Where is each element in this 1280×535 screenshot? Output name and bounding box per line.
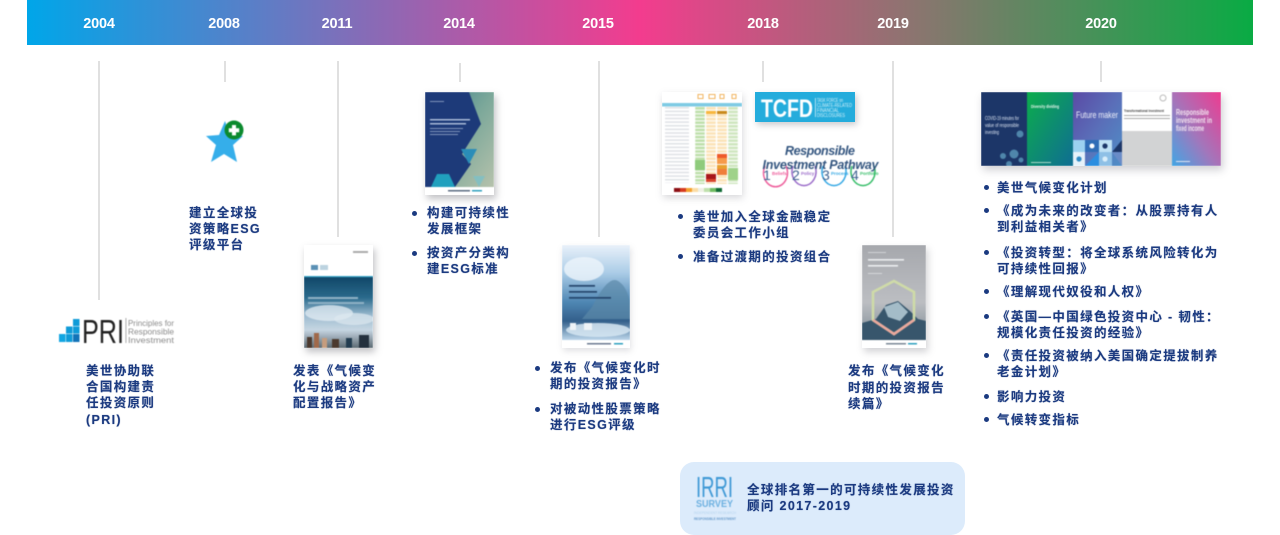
graphic: responsible investment pathway: 4 xyxy=(851,167,859,183)
graphic: responsible investment pathway: 1 xyxy=(763,167,771,183)
cover 1: value of responsible xyxy=(985,123,1019,129)
text: 2008 rating platform: 资策略ESG xyxy=(189,222,261,236)
bullet 6 xyxy=(997,348,1219,379)
bullet: ESG standards: 按资产分类构 xyxy=(427,246,510,260)
bullet: FSB working group: 委员会工作小组 xyxy=(693,226,790,240)
cover 5: Responsible xyxy=(1176,108,1209,117)
logo: PRI: Responsible xyxy=(128,326,174,336)
graphic: responsible investment pathway: Portfolio xyxy=(860,171,879,176)
graphic: responsible investment pathway: 2 xyxy=(792,167,800,183)
cover 4: Transformational Investment xyxy=(1124,108,1164,113)
bullet: ESG standards: 建ESG标准 xyxy=(427,262,499,276)
callout: IRRI survey award xyxy=(680,462,965,535)
text: ranking xyxy=(746,482,955,513)
graphic: responsible investment pathway: 3 xyxy=(822,167,830,183)
text: 2008 rating platform: 评级平台 xyxy=(189,238,244,252)
bullet 2 xyxy=(997,204,1219,234)
logo: IRRI survey: SURVEY xyxy=(696,499,733,510)
cover 3 xyxy=(1073,92,1122,166)
year 2018: 2018 xyxy=(747,16,779,32)
logo: IRRI survey: RESPONSIBLE INVESTMENT xyxy=(694,517,737,521)
text: PRI 2004: (PRI) xyxy=(86,413,122,427)
report cover: 2015 xyxy=(562,245,630,348)
bullet 6: 老金计划》 xyxy=(997,365,1066,379)
report covers: 2020 xyxy=(981,92,1221,166)
text: ranking: 全球排名第一的可持续性发展投资 xyxy=(747,483,955,497)
cover 1: investing xyxy=(985,130,999,136)
report cover: 2011 xyxy=(304,245,373,348)
text: 2019 report sequel: 发布《气候变化 xyxy=(848,364,945,378)
cover 3: Future maker xyxy=(1076,110,1118,121)
cover 2: Diversity dividing xyxy=(1031,104,1059,109)
bullet 6: 《责任投资被纳入美国确定提拔制养 xyxy=(997,349,1219,363)
bullet: climate report: 发布《气候变化时 xyxy=(550,361,661,375)
bullet: passive equity rating xyxy=(550,402,661,432)
bullet: transition portfolio: 准备过渡期的投资组合 xyxy=(693,250,832,264)
graphic: responsible investment pathway: Investment Pathway xyxy=(762,158,880,172)
bullet: climate report xyxy=(550,360,661,391)
text: 2018 bullets xyxy=(693,210,832,264)
text: 2008 rating platform: 建立全球投 xyxy=(189,206,258,220)
year 2019: 2019 xyxy=(877,16,909,32)
text: PRI 2004: 美世协助联 xyxy=(86,364,155,378)
text: 2019 report sequel: 续篇》 xyxy=(848,397,890,411)
text: 2014 bullets xyxy=(426,206,510,276)
bullet 1: 美世气候变化计划 xyxy=(997,181,1108,195)
chart: sector heatmap xyxy=(662,92,742,195)
logo: TCFD xyxy=(755,92,855,122)
graphic: responsible investment pathway: Beliefs xyxy=(772,171,787,176)
bullet: framework: 发展框架 xyxy=(427,222,482,236)
text: PRI 2004 xyxy=(86,364,155,427)
cover 4 xyxy=(1122,92,1172,166)
text: PRI 2004: 任投资原则 xyxy=(86,396,155,410)
bullet: ESG standards xyxy=(426,246,510,276)
logo: TCFD: DISCLOSURES xyxy=(817,113,846,119)
year 2008: 2008 xyxy=(208,16,240,32)
year 2015: 2015 xyxy=(582,16,614,32)
bullet 5 xyxy=(997,310,1220,340)
graphic: responsible investment pathway xyxy=(762,144,880,188)
bullet: framework xyxy=(426,206,510,236)
cover 1: COVID-19 minutes for xyxy=(985,116,1019,122)
year 2011: 2011 xyxy=(322,16,352,32)
year 2014: 2014 xyxy=(443,16,475,32)
text: 2020 bullets xyxy=(997,180,1220,427)
report cover: 2019 xyxy=(862,245,926,348)
text: 2019 report sequel xyxy=(848,364,945,411)
bullet 4: 《理解现代奴役和人权》 xyxy=(997,285,1149,299)
cover 2 xyxy=(1027,92,1073,166)
bullet: FSB working group: 美世加入全球金融稳定 xyxy=(693,210,832,224)
year 2004: 2004 xyxy=(83,16,115,32)
text: 2015 bullets xyxy=(550,360,661,432)
bullet 8: 气候转变指标 xyxy=(997,413,1080,427)
logo: IRRI survey: INDEPENDENT RESEARCH xyxy=(694,511,736,515)
report cover: 2014 xyxy=(425,92,494,195)
graphic: responsible investment pathway: Process xyxy=(831,171,849,176)
bullet: climate report: 期的投资报告》 xyxy=(550,377,647,391)
bullet 3: 可持续性回报》 xyxy=(997,262,1094,276)
bullet 2: 《成为未来的改变者：从股票持有人 xyxy=(997,204,1219,218)
cover 1 xyxy=(981,92,1027,167)
year 2020: 2020 xyxy=(1085,16,1117,32)
graphic: responsible investment pathway: Responsible xyxy=(785,144,855,158)
bullet 2: 到利益相关者》 xyxy=(997,220,1094,234)
logo: TCFD: FINANCIAL xyxy=(817,108,839,114)
timeline gradient bar xyxy=(27,0,1253,45)
text: PRI 2004: 合国构建责 xyxy=(86,380,155,394)
bullet 5: 规模化责任投资的经验》 xyxy=(997,326,1149,340)
text: 2019 report sequel: 时期的投资报告 xyxy=(848,381,945,395)
text: 2011 climate report: 化与战略资产 xyxy=(293,380,376,394)
text: ranking: 顾问 2017-2019 xyxy=(747,499,851,513)
bullet: passive equity rating: 对被动性股票策略 xyxy=(550,402,661,416)
bullet 3 xyxy=(997,246,1219,276)
text: 2008 rating platform xyxy=(189,206,261,252)
graphic: responsible investment pathway: Policy xyxy=(801,171,815,176)
logo: PRI: Investment xyxy=(128,335,175,345)
year labels xyxy=(83,16,1117,32)
logo: TCFD: TASK FORCE on xyxy=(817,98,843,104)
bullet 3: 《投资转型：将全球系统风险转化为 xyxy=(997,246,1219,260)
text: 2011 climate report: 发表《气候变 xyxy=(293,364,376,378)
logo: IRRI survey xyxy=(694,473,737,521)
logo: PRI xyxy=(58,317,175,345)
bullet: FSB working group xyxy=(693,210,832,240)
bullet: passive equity rating: 进行ESG评级 xyxy=(550,418,636,432)
cover 5 xyxy=(1172,92,1221,166)
bullet 5: 《英国—中国绿色投资中心 - 韧性： xyxy=(997,310,1220,324)
bullet: framework: 构建可持续性 xyxy=(427,206,510,220)
text: 2011 climate report xyxy=(293,364,376,410)
icon: star with plus badge xyxy=(206,120,244,162)
bullet 7: 影响力投资 xyxy=(997,390,1066,404)
text: 2011 climate report: 配置报告》 xyxy=(293,396,362,410)
